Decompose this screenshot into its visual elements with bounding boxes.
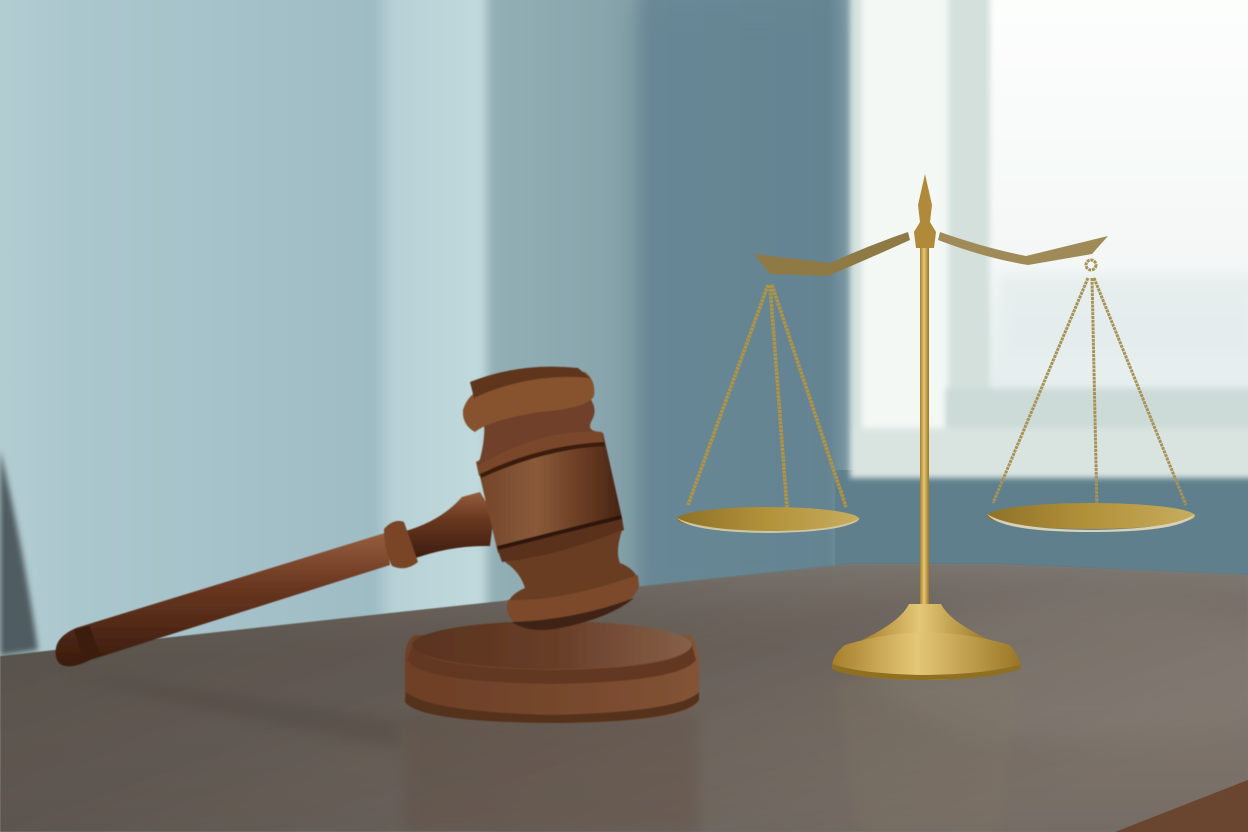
sound block: [405, 621, 699, 723]
left pan and chains: [677, 285, 860, 533]
window with frame: [850, 0, 1248, 478]
scale base: [832, 604, 1021, 680]
gavel handle: [56, 533, 390, 666]
table edge wood: [1115, 780, 1248, 832]
dark chair at left edge: [0, 450, 38, 656]
reflection and shadows on table: [60, 672, 1020, 832]
gavel: [56, 367, 639, 666]
scale beam: [754, 232, 910, 276]
scales of justice: [677, 174, 1195, 680]
right pan and chains: [987, 260, 1195, 532]
scale post and finial: [920, 240, 929, 610]
table top: [0, 564, 1248, 832]
gavel head: [478, 433, 622, 553]
